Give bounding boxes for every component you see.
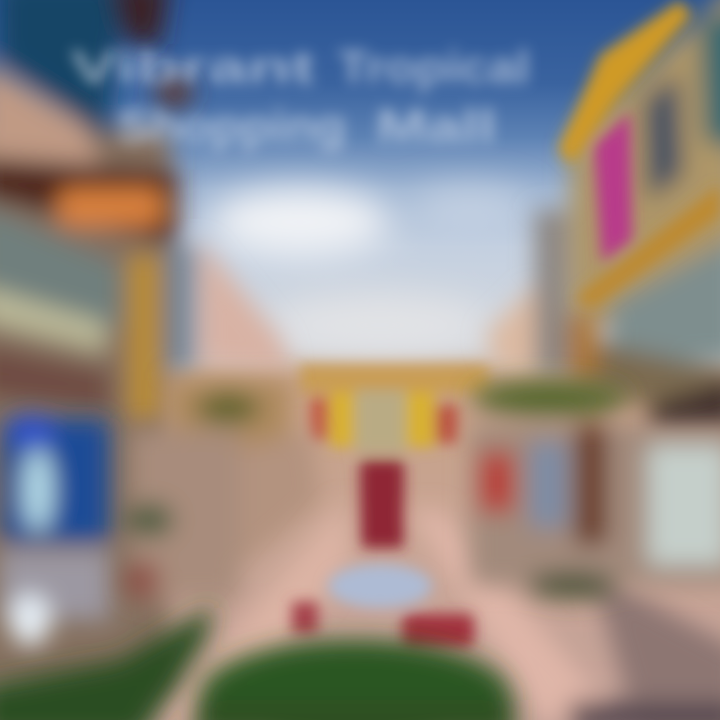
heading: Shopping	[118, 100, 346, 152]
right lower shops	[470, 380, 720, 599]
converging walkway	[160, 500, 720, 720]
blue screen	[0, 414, 110, 646]
heading: Tropical	[338, 41, 530, 93]
foreground kiosk	[292, 564, 474, 648]
heading: Mall	[376, 100, 496, 152]
clouds	[210, 188, 530, 355]
central far building	[300, 365, 490, 548]
heading: Vibrant	[70, 41, 315, 93]
middle trees and shops	[124, 380, 320, 600]
ground plaza	[0, 362, 720, 720]
right buildings	[485, 0, 720, 432]
foreground hedges	[0, 605, 515, 720]
sky background	[0, 0, 720, 380]
colourful right facade	[558, 0, 720, 308]
heading	[70, 41, 530, 152]
left buildings	[0, 0, 290, 690]
